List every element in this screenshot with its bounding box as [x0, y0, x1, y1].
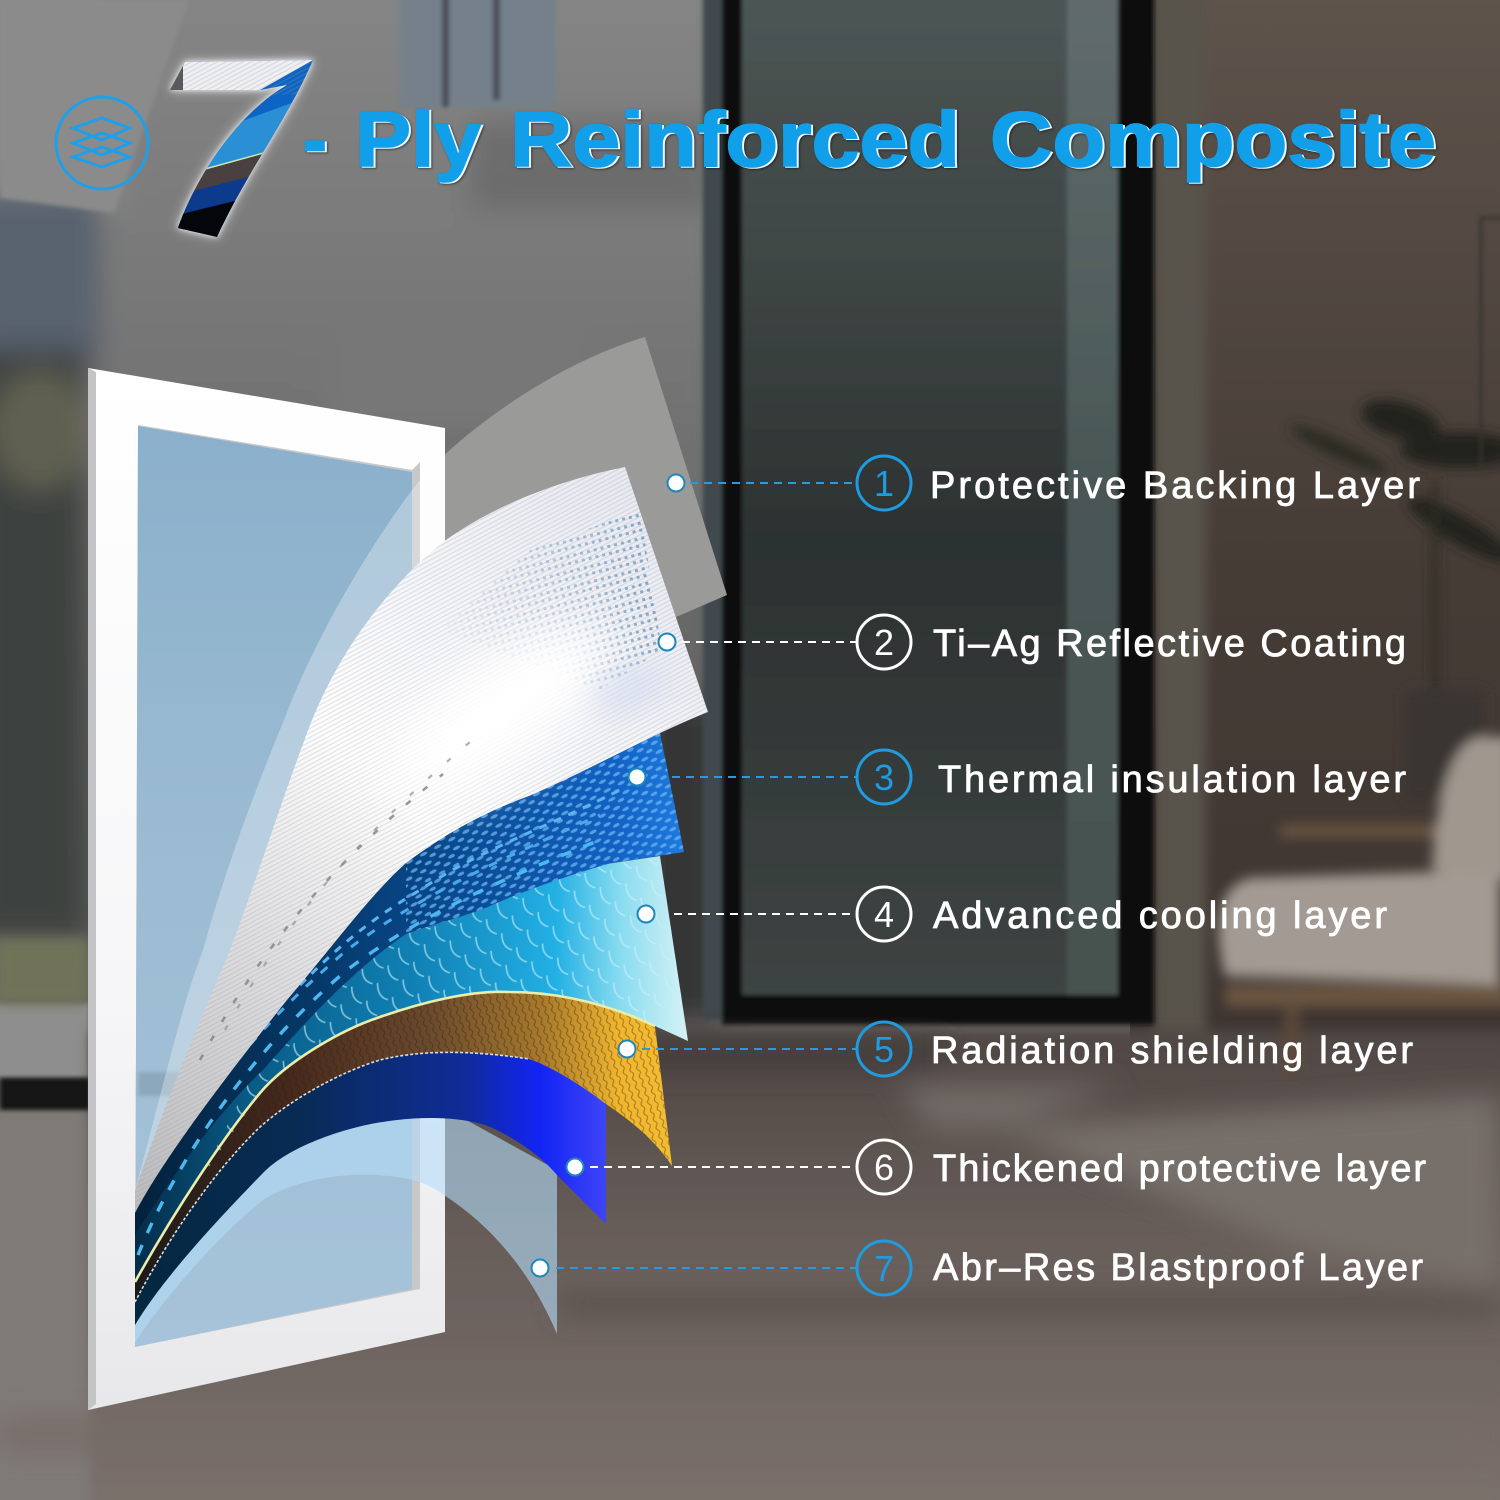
callout 6: 6 — [874, 1147, 894, 1188]
callout 5: 5 — [874, 1029, 894, 1070]
callout 3: Thermal insulation layer — [938, 759, 1406, 801]
callout 5 — [618, 1022, 1413, 1076]
callout 7 — [532, 1241, 1423, 1295]
callout 7: Abr–Res Blastproof Layer — [933, 1247, 1423, 1289]
title: - — [303, 95, 327, 183]
callout 2: Ti–Ag Reflective Coating — [933, 623, 1406, 665]
callout 7: 7 — [874, 1248, 894, 1289]
layer 5: radiation shielding sheet — [135, 992, 672, 1302]
window frame — [88, 368, 445, 1410]
callout 2 — [658, 615, 1406, 669]
layer 1: protective backing sheet — [135, 337, 727, 1213]
layer 6: thickened protective sheet — [135, 1045, 606, 1325]
title: Reinforced — [510, 95, 960, 183]
callout 2: 2 — [874, 622, 894, 663]
callout 5: Radiation shielding layer — [931, 1030, 1413, 1072]
title: Composite — [990, 95, 1436, 183]
callout 4: Advanced cooling layer — [933, 895, 1387, 937]
layer 3: thermal insulation sheet — [135, 733, 684, 1255]
big numeral 7 made from layer textures — [165, 55, 325, 250]
title — [303, 95, 1436, 183]
callout 4 — [638, 887, 1387, 941]
callout 1 — [668, 456, 1420, 510]
layer 2: Ti-Ag reflective coating sheet — [135, 467, 708, 1213]
callout 1: Protective Backing Layer — [930, 465, 1420, 507]
callout 3: 3 — [874, 757, 894, 798]
callout 1: 1 — [874, 463, 894, 504]
callout 6 — [566, 1140, 1426, 1194]
layer 4: advanced cooling sheet — [135, 856, 688, 1282]
layer 7: abrasion-resistant blastproof sheet — [135, 1100, 557, 1343]
title: Ply — [355, 95, 481, 183]
callout 6: Thickened protective layer — [933, 1148, 1426, 1190]
icon: layers in circle — [56, 97, 148, 189]
callout 4: 4 — [874, 894, 894, 935]
callout 3 — [628, 750, 1406, 804]
